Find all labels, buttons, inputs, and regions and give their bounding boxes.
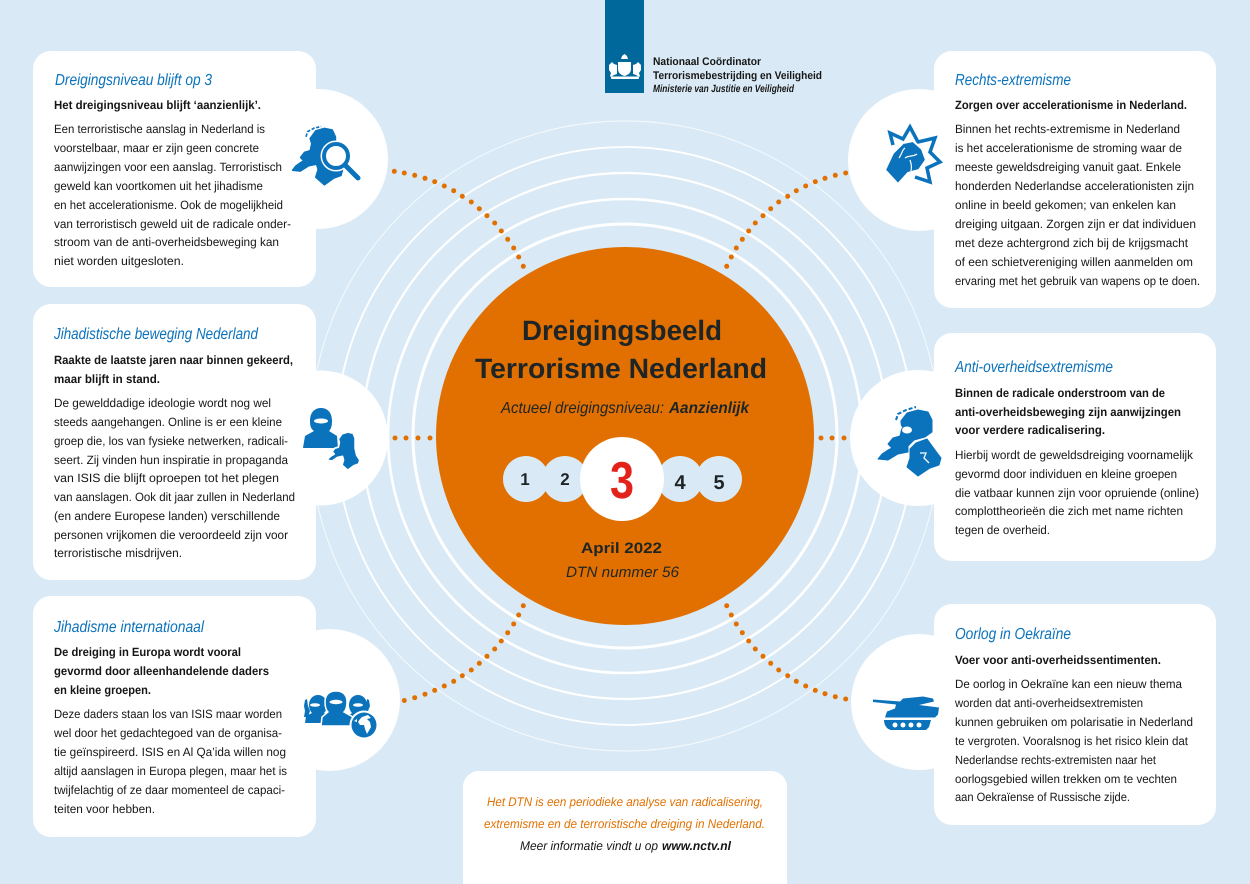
threat level label [500, 400, 750, 417]
subheading: De dreiging in Europa wordt vooral [54, 645, 241, 659]
body text: altijd aanslagen in Europa plegen, maar het is [54, 764, 287, 778]
body text: wel door het gedachtegoed van de organisa- [53, 726, 282, 740]
body text [53, 707, 287, 816]
threat level label: Actueel dreigingsniveau: [500, 400, 664, 417]
body text: tegen de overheid. [955, 523, 1050, 537]
body text: (en andere Europese landen) verschillende [54, 509, 280, 523]
dotted connector: middle left [392, 436, 432, 440]
heading: Dreigingsniveau blijft op 3 [55, 72, 212, 89]
body text: van terroristisch geweld uit de radicale onder- [54, 217, 291, 231]
panel: Jihadistische beweging Nederland [33, 304, 388, 580]
icon: map with magnifying glass [292, 126, 358, 185]
date and edition: April 2022 [581, 540, 662, 557]
body text: van aanslagen. Ook dit jaar zullen in Nederland [54, 490, 295, 504]
logo: Nationaal Coördinator: Terrorismebestrijding en Veiligheid [653, 70, 822, 82]
body text: De gewelddadige ideologie wordt nog wel [54, 396, 271, 410]
threat level label: Aanzienlijk [668, 400, 750, 417]
panel: Rechts-extremisme [848, 51, 1216, 308]
body text: aanwijzingen voor een aanslag. Terroristisch [54, 160, 282, 174]
body text: meeste geweldsdreiging vanuit gaat. Enkele [955, 160, 1181, 174]
body text: voorstelbaar, maar er zijn geen concrete [54, 141, 259, 155]
body text: van ISIS die blijft oproepen tot het plegen [54, 471, 279, 485]
body text: steeds aangehangen. Online is er een kleine [54, 415, 282, 429]
panel: Jihadisme internationaal [33, 596, 400, 837]
callout: about the DTN: Het DTN is een periodieke analyse van radicalisering, [487, 795, 763, 809]
heading: Jihadistische beweging Nederland [53, 326, 259, 343]
body text: Een terroristische aanslag in Nederland is [54, 122, 265, 136]
body text: geweld kan voortkomen uit het jihadisme [54, 179, 263, 193]
body text: ervaring met het gebruik van wapens op te doen. [955, 274, 1200, 288]
body text: honderden Nederlandse accelerationisten zijn [955, 179, 1194, 193]
icon: masked person with map [303, 408, 360, 470]
body text: of een schietvereniging willen aanmelden om [955, 255, 1193, 269]
threat level scale: 3 [610, 452, 634, 510]
body text: Nederlandse rechts-extremisten naar het [955, 753, 1157, 767]
heading: Jihadisme internationaal [53, 619, 204, 636]
central circle [436, 247, 814, 625]
dotted connector: top left [392, 169, 526, 269]
body text: oorlogsgebied willen trekken om te vechten [955, 772, 1177, 786]
icon: three masked figures with globe [304, 691, 378, 740]
subheading: Voer voor anti-overheidssentimenten. [955, 653, 1161, 667]
threat level scale: 5 [713, 472, 725, 494]
body text: stroom van de anti-overheidsbeweging kan [54, 235, 279, 249]
threat level scale [503, 437, 742, 521]
body text [955, 448, 1199, 537]
body text: niet worden uitgesloten. [54, 254, 184, 268]
heading: Oorlog in Oekraïne [955, 626, 1071, 643]
body text: Hierbij wordt de geweldsdreiging voornamelijk [955, 448, 1194, 462]
body text: online in beeld gekomen; van enkelen kan [955, 198, 1176, 212]
dotted connector: top right [724, 169, 858, 269]
body text: worden dat anti-overheidsextremisten [954, 696, 1143, 710]
subheading: en kleine groepen. [54, 683, 151, 697]
icon: tank [873, 696, 939, 730]
logo: Nationaal Coördinator [605, 0, 822, 95]
icon: fist with burst [885, 127, 940, 184]
body text: kunnen gebruiken om polarisatie in Nederland [955, 715, 1193, 729]
callout: about the DTN: Meer informatie vindt u op [520, 839, 658, 853]
body text: twijfelachtig of ze daar momenteel de capaci- [54, 783, 285, 797]
subheading: Het dreigingsniveau blijft ‘aanzienlijk’. [54, 98, 261, 112]
title: Dreigingsbeeld [522, 315, 722, 346]
icon: map with fist [878, 407, 941, 476]
body text: dreiging uitgaan. Zorgen zijn er dat individuen [955, 217, 1196, 231]
callout: about the DTN [463, 771, 787, 884]
threat level scale: 1 [520, 470, 530, 489]
logo: Nationaal Coördinator: Nationaal Coördinator [653, 56, 762, 68]
title: Terrorisme Nederland [475, 353, 767, 384]
date and edition: DTN nummer 56 [566, 564, 680, 581]
body text: teiten voor hebben. [54, 802, 155, 816]
subheading [955, 386, 1181, 437]
body text: te vergroten. Vooralsnog is het risico klein dat [955, 734, 1189, 748]
dotted connector: middle right [818, 436, 846, 440]
subheading: maar blijft in stand. [54, 372, 160, 386]
subheading: Binnen de radicale onderstroom van de [955, 386, 1165, 400]
subheading: gevormd door alleenhandelende daders [54, 664, 269, 678]
dotted connector: bottom left [392, 603, 526, 705]
subheading: anti-overheidsbeweging zijn aanwijzingen [955, 405, 1181, 419]
body text: gevormd door individuen en kleine groepen [955, 467, 1177, 481]
body text [54, 122, 291, 268]
dotted connector: bottom right [724, 603, 858, 703]
threat level scale: 4 [674, 472, 686, 494]
subheading [54, 353, 293, 386]
heading: Rechts-extremisme [955, 72, 1071, 89]
body text [955, 122, 1200, 288]
body text: Binnen het rechts-extremisme in Nederland [955, 122, 1180, 136]
logo: Nationaal Coördinator: Ministerie van Justitie en Veiligheid [653, 83, 794, 95]
callout: about the DTN: www.nctv.nl [662, 839, 731, 853]
callout: about the DTN: extremisme en de terroristische dreiging in Nederland. [484, 817, 765, 831]
body text: personen vrijkomen die veroordeeld zijn voor [54, 528, 288, 542]
subheading: Zorgen over accelerationisme in Nederland. [955, 98, 1187, 112]
date and edition [566, 540, 680, 581]
body text: Deze daders staan los van ISIS maar worden [54, 707, 282, 721]
body text: tie geïnspireerd. ISIS en Al Qa’ida willen nog [54, 745, 286, 759]
body text: seert. Zij vinden hun inspiratie in propaganda [54, 453, 288, 467]
panel: Oorlog in Oekraïne [851, 604, 1216, 825]
body text: is het accelerationisme de stroming waar de [955, 141, 1182, 155]
body text [954, 677, 1193, 804]
body text: die vatbaar kunnen zijn voor opruiende (online) [955, 486, 1199, 500]
subheading [54, 645, 269, 697]
body text: met deze achtergrond zich bij de krijgsmacht [955, 236, 1189, 250]
threat level scale: 2 [560, 470, 570, 489]
body text: aan Oekraïense of Russische zijde. [955, 790, 1130, 804]
body text: complottheorieën die zich met name richten [955, 504, 1183, 518]
panel: Dreigingsniveau blijft op 3 [33, 51, 388, 287]
body text: terroristische misdrijven. [54, 546, 182, 560]
body text: en het accelerationisme. Ook de mogelijkheid [54, 198, 283, 212]
subheading: voor verdere radicalisering. [955, 423, 1105, 437]
body text [54, 396, 295, 560]
panel: Anti-overheidsextremisme [850, 333, 1216, 561]
subheading: Raakte de laatste jaren naar binnen gekeerd, [54, 353, 293, 367]
title [475, 315, 767, 384]
body text: De oorlog in Oekraïne kan een nieuw thema [955, 677, 1182, 691]
heading: Anti-overheidsextremisme [954, 359, 1113, 376]
body text: groep die, los van fysieke netwerken, radicali- [54, 434, 288, 448]
